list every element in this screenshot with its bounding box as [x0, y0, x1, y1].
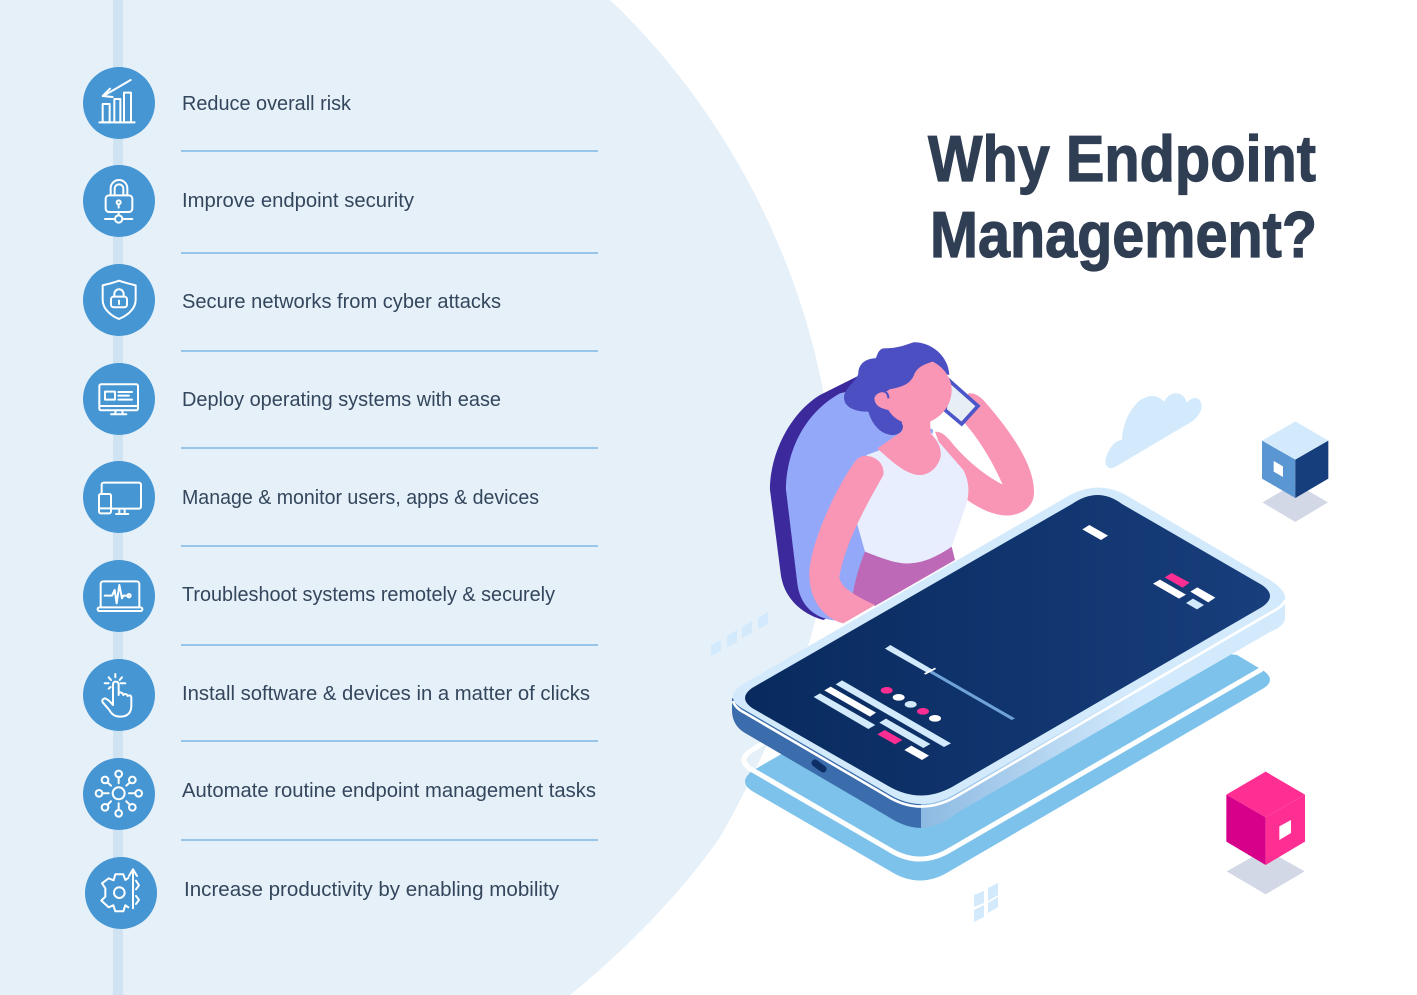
icon: window tiles: [974, 883, 998, 922]
item 6: troubleshoot systems remotely and securely: Troubleshoot systems remotely & securely: [182, 583, 556, 606]
item 8: automate routine endpoint management tasks: [83, 758, 596, 830]
neck and chest: [877, 418, 941, 475]
phone: right side: [921, 596, 1285, 828]
item 4: deploy operating systems with ease: [83, 363, 501, 435]
item 1: reduce overall risk: Reduce overall risk: [182, 92, 352, 115]
screen UI left group: [814, 645, 1015, 760]
decorative small squares: [711, 612, 768, 656]
face: [874, 362, 952, 425]
phone: top face: [733, 488, 1285, 804]
torso top: [855, 432, 968, 563]
far arm: [935, 393, 1034, 515]
cloud: [1105, 393, 1202, 468]
text bars: [836, 680, 951, 747]
slider: [885, 645, 932, 672]
item 1: reduce overall risk: [83, 67, 352, 139]
item 7: install software and devices in a matter of clicks: Install software & devices in a matter of clicks: [182, 682, 590, 705]
phone: white rim: [733, 600, 1285, 806]
item 8: automate routine endpoint management tasks: Automate routine endpoint management tasks: [182, 779, 596, 802]
white outline plate: [744, 669, 1262, 859]
item 2: improve endpoint security: [83, 165, 415, 237]
chair back dark: [770, 375, 870, 620]
small blue cube: [1262, 421, 1328, 522]
item 3: secure networks from cyber attacks: [83, 264, 501, 336]
title: Why Endpoint: [928, 122, 1316, 195]
item 5: manage and monitor users, apps and devices: Manage & monitor users, apps & devices: [182, 486, 539, 509]
chair back light: [786, 388, 933, 621]
pink cube: [1226, 772, 1305, 894]
item 4: deploy operating systems with ease: Deploy operating systems with ease: [182, 388, 501, 411]
phone: left side: [732, 698, 921, 828]
ear shadow: [883, 391, 888, 398]
item 7: install software and devices in a matter of clicks: [83, 659, 590, 731]
title: [928, 122, 1317, 271]
title: Management?: [930, 198, 1317, 271]
phone: port: [815, 763, 823, 769]
item 9: increase productivity by enabling mobility: Increase productivity by enabling mobility: [184, 878, 560, 901]
lower blue plate: [745, 628, 1270, 880]
background semicircle panel: [0, 0, 831, 995]
near arm: [809, 456, 884, 623]
item 9: increase productivity by enabling mobility: [85, 857, 560, 929]
item 5: manage and monitor users, apps and devices: [83, 461, 539, 533]
vertical timeline bar: [113, 0, 123, 995]
skirt: [853, 547, 955, 606]
screen UI right group: [1082, 525, 1215, 609]
list of endpoint management benefits: [83, 67, 596, 929]
phone held to ear: [945, 380, 978, 424]
item 3: secure networks from cyber attacks: Secure networks from cyber attacks: [182, 290, 501, 313]
hair: [844, 342, 949, 435]
divider lines: [181, 151, 598, 840]
item 2: improve endpoint security: Improve endpoint security: [182, 189, 415, 212]
illustration: woman on phone: [770, 342, 1034, 623]
item 6: troubleshoot systems remotely and securely: [83, 560, 556, 632]
phone: screen: [745, 495, 1270, 796]
status dots: [881, 687, 893, 694]
